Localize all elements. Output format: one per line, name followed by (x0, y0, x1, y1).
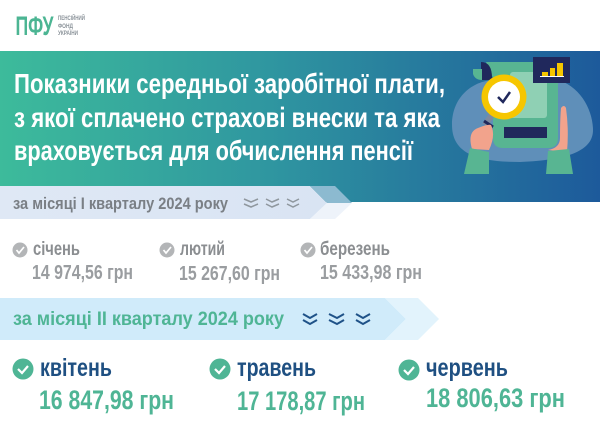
chevrons: first quarter (244, 199, 299, 207)
document scroll curl (481, 62, 492, 80)
item: червень: червень (426, 354, 508, 382)
document inner panel (510, 72, 547, 118)
ribbon: first quarter (0, 186, 352, 219)
item: лютий: 15 267,60 грн (179, 263, 280, 285)
item: квітень (12, 354, 174, 415)
chart card (533, 57, 570, 83)
title: Показники середньої заробітної плати, (14, 68, 445, 99)
magnifier lens (482, 74, 526, 120)
item: січень (12, 239, 133, 284)
item: січень: 14 974,56 грн (32, 262, 133, 284)
document (486, 62, 558, 148)
left hand and sleeve (470, 125, 493, 150)
background blob (452, 79, 593, 162)
item: березень: березень (320, 239, 390, 260)
logo: Pension Fund of Ukraine: УКРАЇНИ (58, 30, 78, 37)
document bar (504, 127, 547, 138)
title: враховується для обчислення пенсії (14, 135, 414, 166)
item: січень: січень (33, 239, 80, 260)
heading: first quarter: за місяці І кварталу 2024 року (13, 194, 228, 213)
logo: Pension Fund of Ukraine: ПЕНСІЙНИЙ (58, 14, 85, 22)
item: червень: 18 806,63 грн (426, 383, 565, 413)
item: березень (300, 239, 422, 284)
item: лютий (160, 239, 280, 285)
item: травень (210, 354, 365, 416)
item: травень: травень (237, 354, 316, 382)
logo: Pension Fund of Ukraine: ПФУ (16, 11, 54, 41)
heading: second quarter: за місяці ІІ кварталу 2024 року (13, 309, 284, 330)
title (14, 68, 445, 166)
item: березень: 15 433,98 грн (320, 262, 422, 284)
item: квітень: квітень (40, 354, 112, 382)
banner background (0, 51, 600, 202)
chevrons: second quarter (303, 314, 370, 324)
ribbon: second quarter (0, 298, 439, 340)
item: червень (398, 354, 565, 413)
magnifier handle (485, 113, 493, 125)
logo: Pension Fund of Ukraine: ФОНД (58, 24, 74, 30)
item: лютий: лютий (180, 239, 225, 260)
item: квітень: 16 847,98 грн (39, 385, 174, 415)
right hand and sleeve (548, 106, 568, 152)
illustration: document under magnifier with hands (452, 57, 593, 174)
item: травень: 17 178,87 грн (237, 386, 365, 416)
title: з якої сплачено страхові внески та яка (14, 102, 440, 133)
